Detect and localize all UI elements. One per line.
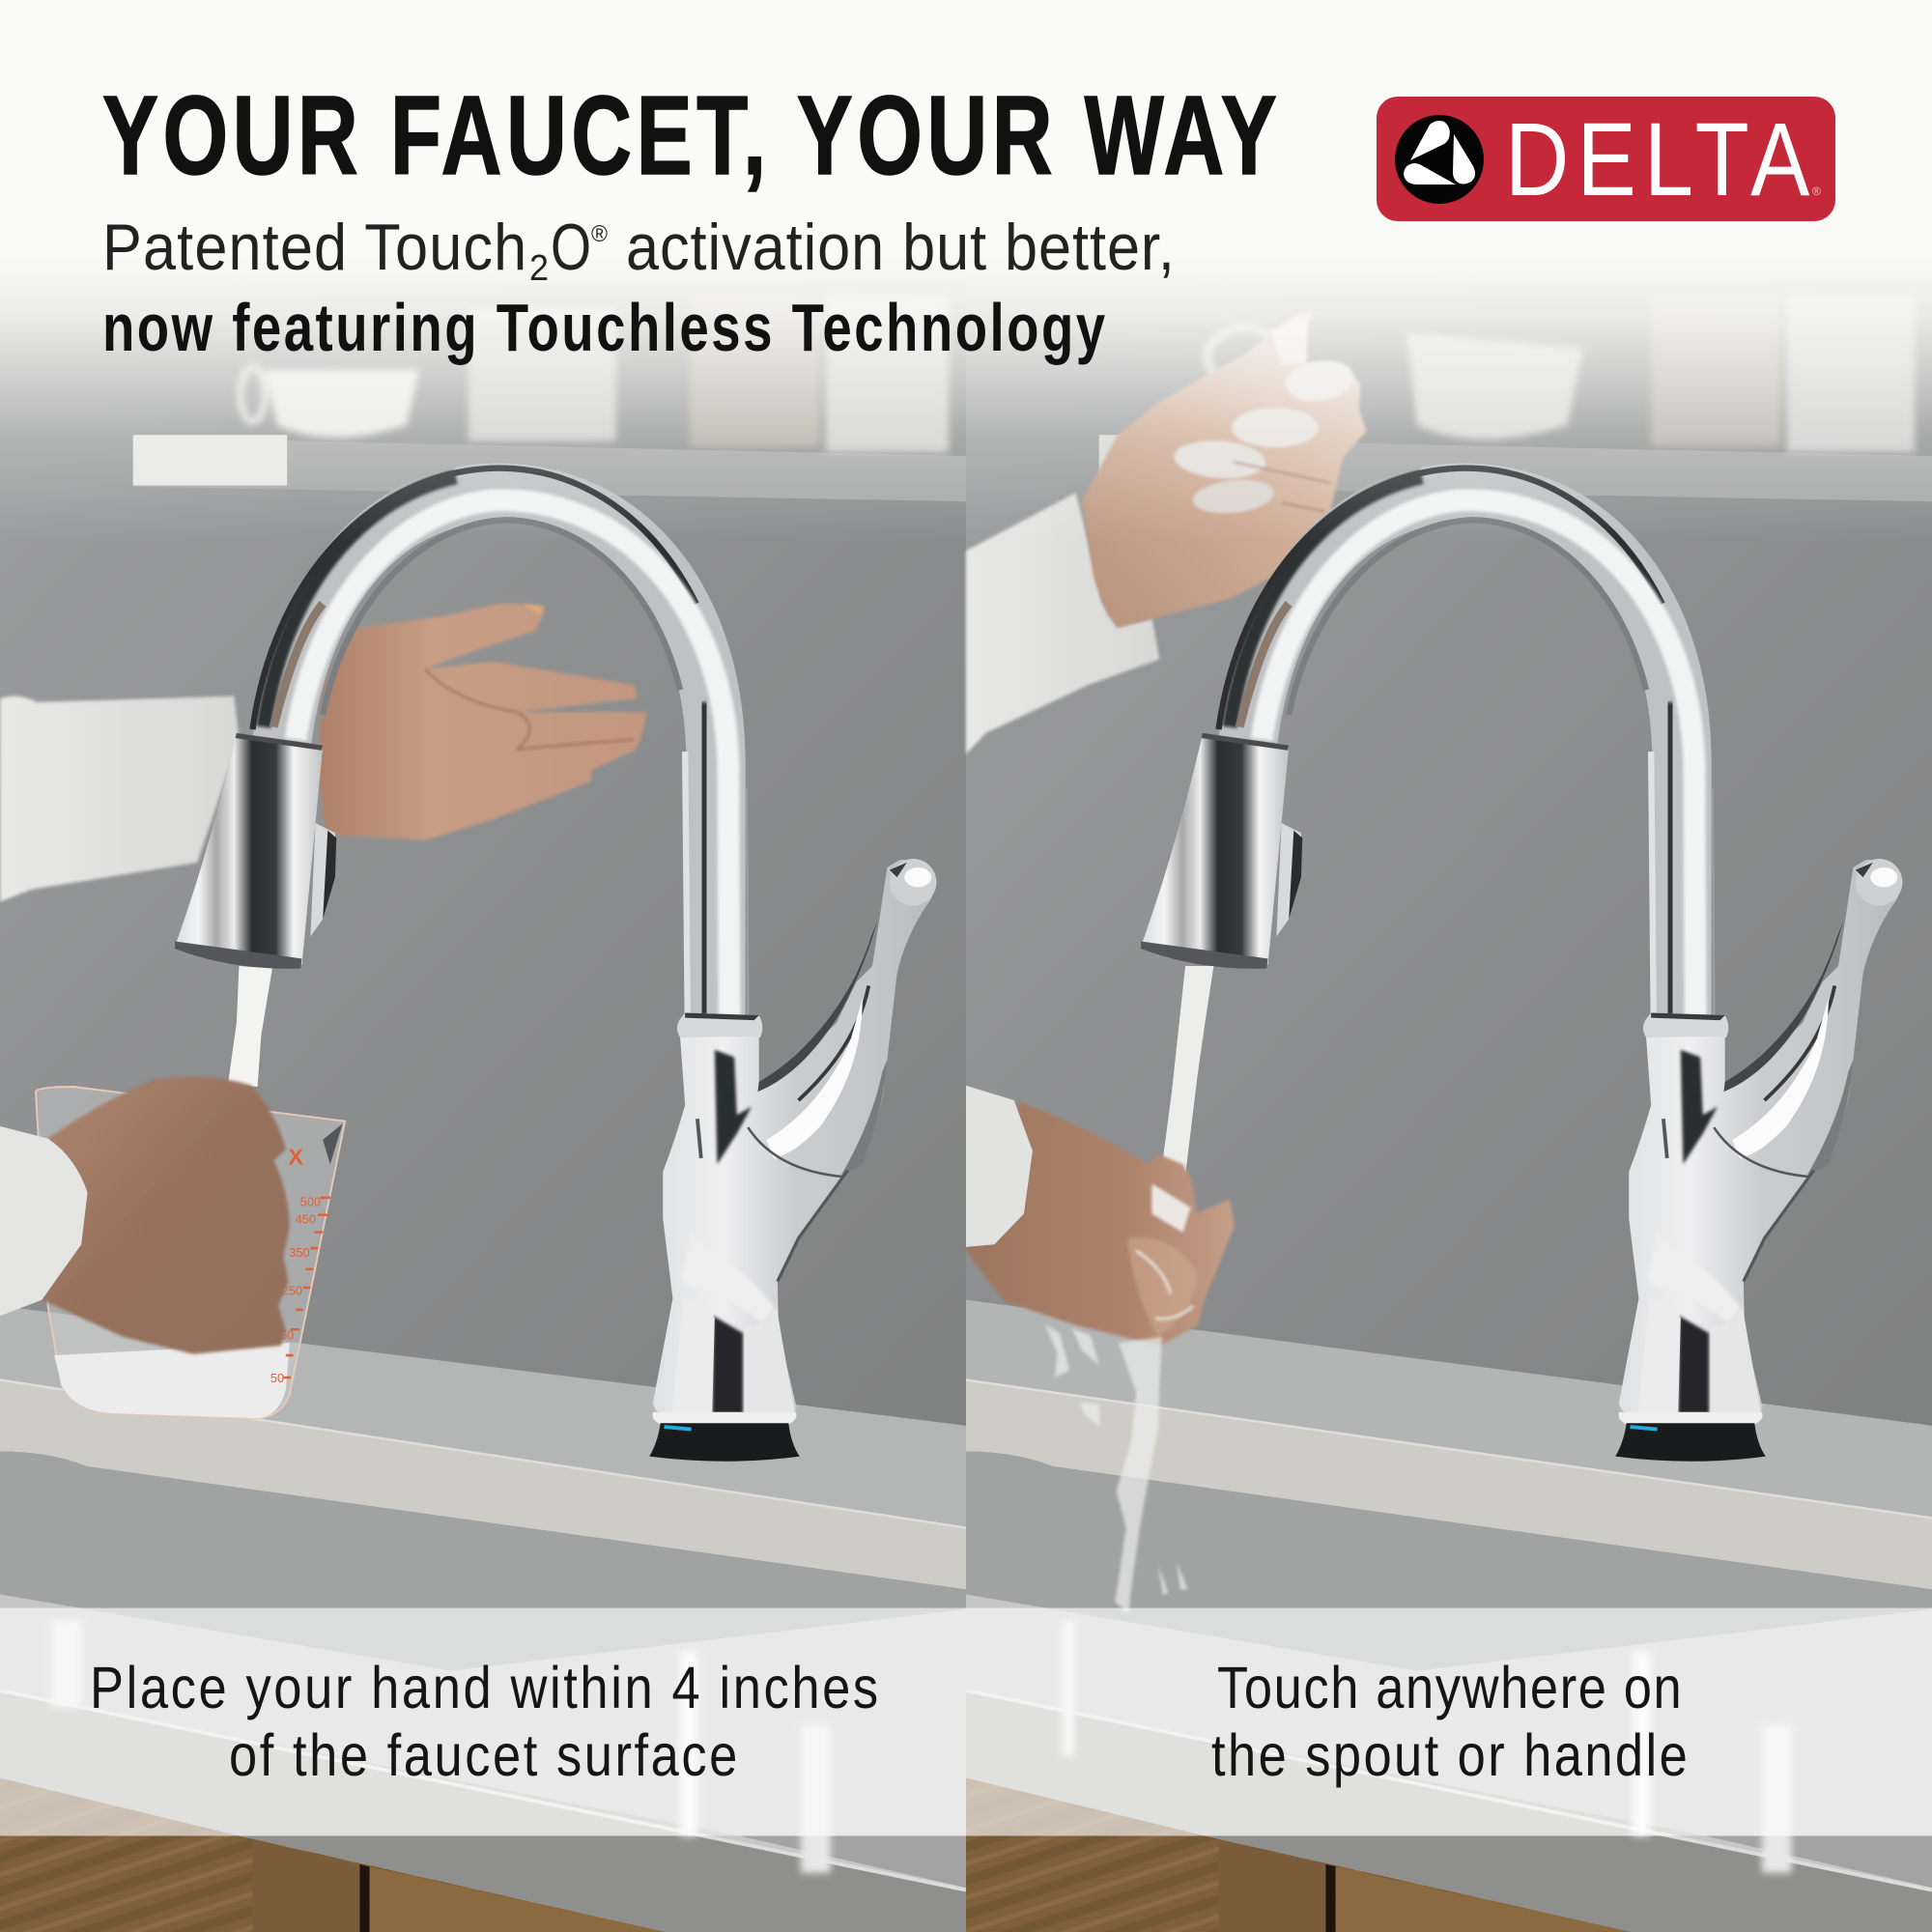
- wall: left: [0, 0, 966, 1602]
- subtitle line 1: O: [551, 211, 591, 284]
- shelf: right: [1099, 296, 1932, 501]
- arm sleeve: lower right: [966, 1086, 1033, 1247]
- hand touching spout: [1082, 312, 1367, 627]
- wood cabinet: left: [0, 1778, 666, 1932]
- arm sleeve: lower left: [0, 1126, 88, 1316]
- caption: left: of the faucet surface: [229, 1722, 737, 1789]
- water stream: left: [228, 966, 272, 1087]
- arm sleeve: upper left: [0, 696, 239, 902]
- fist holding glass: [42, 1077, 290, 1354]
- wordmark: DELTA: [1505, 101, 1809, 218]
- arm sleeve: upper right: [966, 493, 1159, 754]
- measuring glass: 500: [300, 1195, 321, 1209]
- faucet: right: [1141, 469, 1902, 1462]
- caption: left: [90, 1655, 878, 1789]
- measuring glass: 250: [282, 1284, 302, 1298]
- measuring glass: 350: [289, 1245, 310, 1260]
- measuring glass: [36, 1087, 345, 1418]
- counter: right: [966, 1300, 1932, 1932]
- caption: right: [1211, 1655, 1688, 1789]
- caption: left: Place your hand within 4 inches: [90, 1655, 878, 1721]
- subtitle line 1: Patented Touch: [102, 210, 526, 284]
- wall: right: [966, 0, 1932, 1602]
- faucet: left: [175, 469, 936, 1462]
- top fade overlay: [0, 0, 1932, 542]
- registered mark: ®: [1812, 185, 1821, 198]
- caption band: right: [966, 1608, 1932, 1836]
- measuring glass: X: [288, 1144, 303, 1169]
- subtitle line 2: now featuring Touchless Technology: [102, 291, 1105, 366]
- falling water splash: [1045, 1324, 1188, 1614]
- hand under water: [966, 1101, 1235, 1346]
- measuring glass: 450: [296, 1212, 316, 1227]
- caption: right: the spout or handle: [1211, 1722, 1688, 1789]
- measuring glass: 50: [270, 1371, 284, 1385]
- title: YOUR FAUCET, YOUR WAY: [102, 72, 1277, 198]
- water stream: right: [1162, 966, 1213, 1176]
- icon: Delta triangle mark: [1395, 115, 1484, 204]
- caption band: left: [0, 1608, 966, 1836]
- subtitle line 1: [102, 210, 1175, 289]
- open hand near spout: [318, 604, 647, 840]
- panel: right photo: [966, 0, 1932, 1932]
- subtitle line 1: activation but better,: [626, 210, 1175, 284]
- counter: left: [0, 1306, 966, 1932]
- caption: right: Touch anywhere on: [1217, 1655, 1682, 1721]
- subtitle line 1: 2: [529, 248, 549, 289]
- subtitle line 1: ®: [591, 221, 608, 247]
- wood cabinet: right: [966, 1778, 1632, 1932]
- shelf: left: [133, 296, 966, 501]
- measuring glass: 50: [280, 1327, 294, 1342]
- logo: Delta: [1377, 97, 1835, 221]
